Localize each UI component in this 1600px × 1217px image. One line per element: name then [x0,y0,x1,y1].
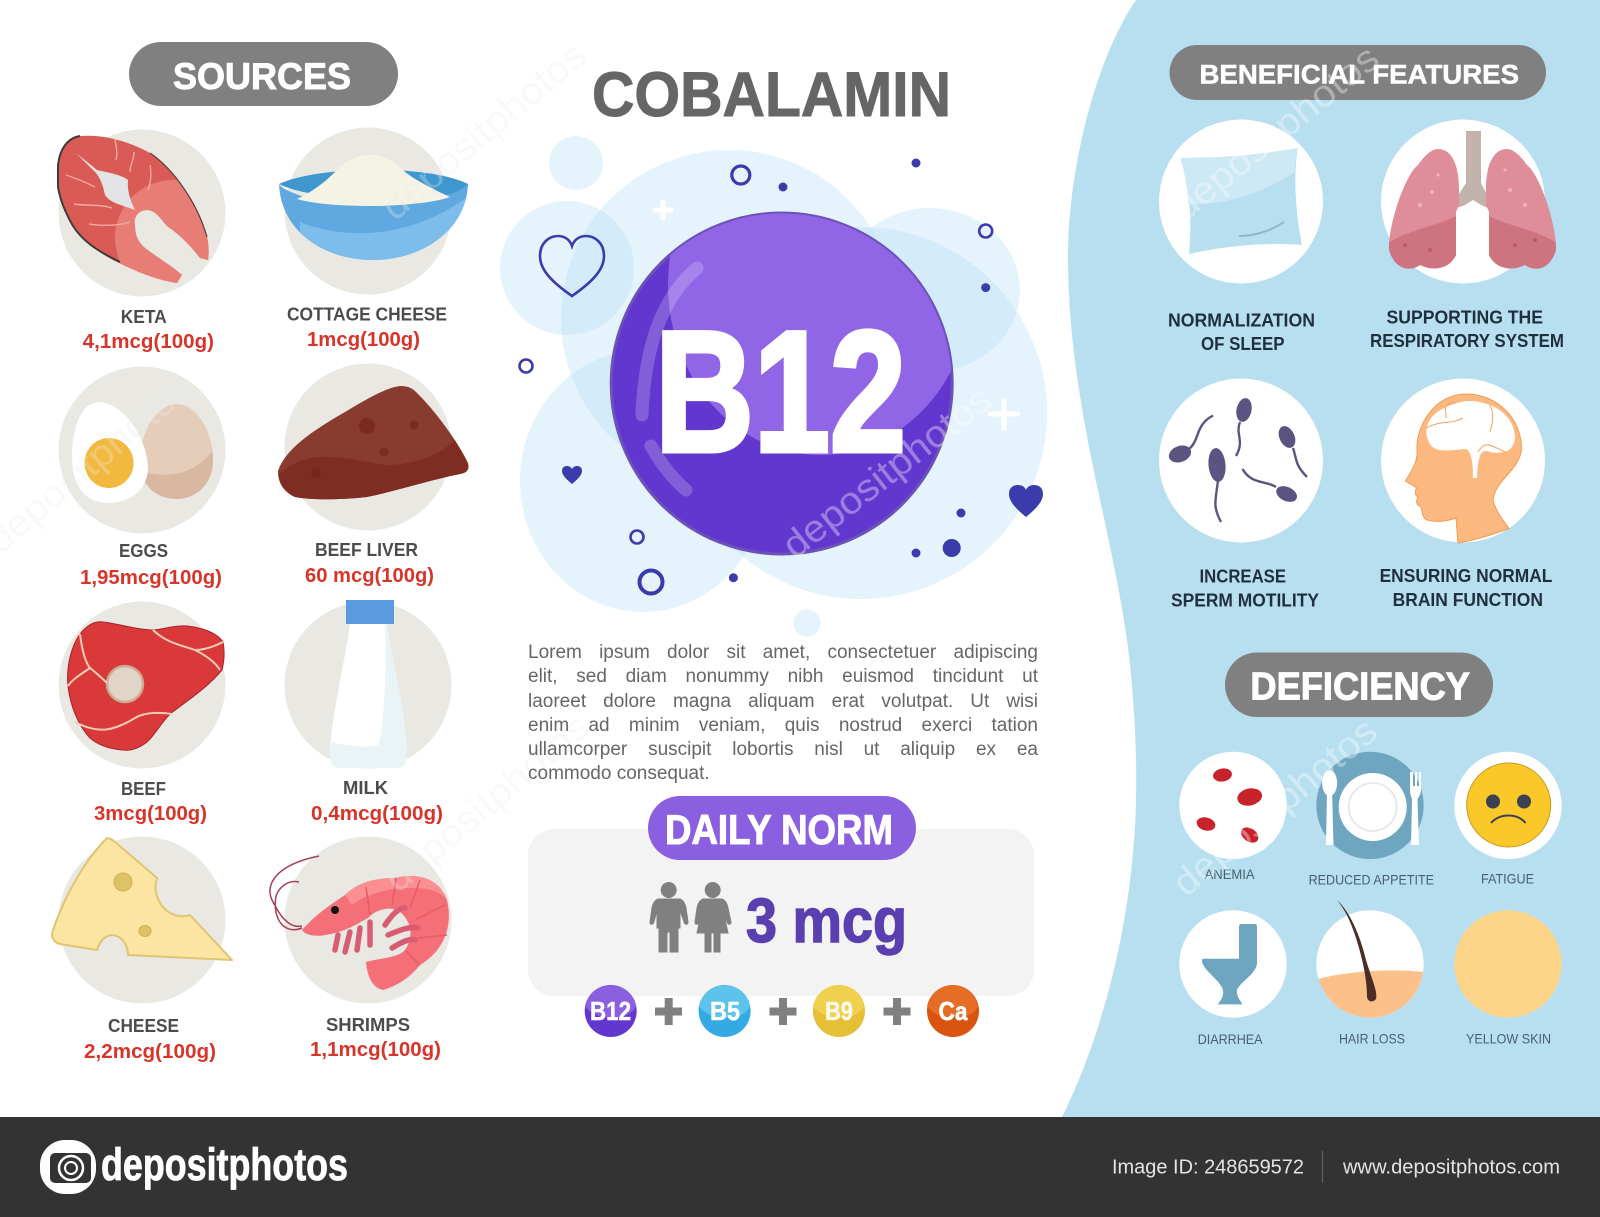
label: beef liver [305,540,434,587]
label: eggs [80,541,222,589]
website: www.depositphotos.com [1342,1156,1560,1179]
icon: anemia [1179,752,1287,859]
label: ensuring normal brain function: ENSURING NORMAL [1380,566,1552,586]
panel: deficiency [1179,652,1562,1047]
icon: shrimp [270,836,452,1004]
text block: lorem ipsum: laoreet dolore magna aliquam erat volutpat. Ut wisi [528,691,1038,712]
image id: Image ID: 248659572 [1112,1156,1304,1179]
label: milk [311,778,443,825]
label: cottage cheese: COTTAGE CHEESE [287,305,447,325]
blue side panel [1062,0,1600,1117]
panel background [528,829,1034,996]
text block: lorem ipsum: commodo consequat. [528,763,710,784]
panel: daily norm [528,796,1034,1037]
label: beef liver: BEEF LIVER [315,540,418,560]
label: normalization of sleep [1168,310,1315,354]
value: 3 mcg: 3 mcg [746,887,907,956]
combination: B12 plus B5 plus B9 plus Ca [585,985,979,1037]
label: shrimps: 1,1mcg(100g) [310,1039,441,1061]
bubble: B9: B9 [825,996,853,1026]
icon: cheese [52,836,232,1004]
icon: diarrhea toilet [1179,910,1287,1018]
text block: lorem ipsum [528,642,1038,784]
vitamin B12 sphere [610,212,954,556]
panel: sources [52,42,475,1063]
label: cheese [84,1016,216,1063]
label: beef [94,779,207,825]
label: increase sperm motility [1171,566,1319,610]
label: keta [83,307,214,353]
label: normalization of sleep: OF SLEEP [1201,334,1284,354]
heading: sources [129,42,398,106]
decorative rings, dots and hearts [520,158,1043,594]
label: yellow skin: YELLOW SKIN [1466,1030,1551,1046]
watermarks: depositphotos [775,378,1000,567]
bubble: B5: B5 [710,996,740,1026]
bubble: B9 [813,985,865,1037]
icon: yellow skin [1454,910,1562,1018]
label: diarrhea: DIARRHEA [1198,1031,1263,1047]
icon: beef steak [58,602,226,768]
logo: camera [40,1140,96,1194]
bubble: B12 [585,985,637,1037]
heading: beneficial features: BENEFICIAL FEATURES [1200,59,1519,89]
heading: daily norm: DAILY NORM [665,806,893,853]
text block: lorem ipsum: enim ad minim veniam, quis nostrud exerci tation [528,715,1038,736]
label: supporting the respiratory system [1370,308,1564,351]
icon: beef liver [278,364,475,530]
icon: sperm cells [1159,378,1323,542]
plus signs [655,998,910,1025]
label: increase sperm motility: INCREASE [1200,566,1286,586]
label: shrimps: SHRIMPS [326,1015,410,1035]
label: shrimps [310,1015,441,1061]
footer bar [0,1117,1600,1217]
icon: cottage cheese bowl [279,128,470,294]
icon: hair loss [1315,900,1425,1020]
watermarks: depositphotos [1164,37,1387,229]
bubble: Ca [927,985,979,1037]
background bubbles [500,136,1047,636]
label: ensuring normal brain function: BRAIN FUNCTION [1393,590,1543,610]
watermarks: depositphotos [1165,710,1386,905]
icon: lungs [1381,120,1560,284]
icon: pillow [1159,120,1323,284]
icon: fatigue face [1454,752,1562,859]
label: cheese: 2,2mcg(100g) [84,1041,216,1063]
text block: lorem ipsum: Lorem ipsum dolor sit amet, consectetuer adipiscing [528,642,1038,663]
logo: wordmark: depositphotos [101,1139,348,1190]
label: fatigue: FATIGUE [1481,870,1534,886]
heading: beneficial features [1170,45,1546,100]
label: reduced appetite: REDUCED APPETITE [1309,872,1434,888]
text block: lorem ipsum: elit, sed diam nonummy nibh euismod tincidunt ut [528,666,1038,687]
heading: deficiency [1225,652,1493,717]
label: ensuring normal brain function [1380,566,1552,610]
panel: beneficial features [1159,45,1564,610]
label: eggs: EGGS [119,541,168,561]
heading: daily norm [648,796,916,860]
label: supporting the respiratory system: SUPPORTING THE [1386,308,1543,328]
heading: sources: SOURCES [173,56,351,97]
vitamin B12 sphere: B12 [655,296,906,488]
label: cottage cheese: 1mcg(100g) [307,329,420,351]
icon: milk bottle [284,600,452,768]
watermarks: depositphotos [377,706,598,901]
bubble: Ca: Ca [938,996,968,1026]
label: milk: MILK [343,778,388,798]
icon: man and woman [650,882,731,952]
label: normalization of sleep: NORMALIZATION [1168,310,1315,330]
icon: reduced appetite plate [1316,752,1424,859]
label: beef: BEEF [121,779,166,799]
label: keta: 4,1mcg(100g) [83,331,214,353]
heading: deficiency: DEFICIENCY [1250,666,1470,708]
icon: head with brain [1381,378,1545,543]
label: eggs: 1,95mcg(100g) [80,567,222,589]
icon: eggs [58,366,226,534]
label: beef liver: 60 mcg(100g) [305,565,434,587]
icon: keta steak [58,130,231,296]
label: supporting the respiratory system: RESPIRATORY SYSTEM [1370,331,1564,351]
bubble: B12: B12 [590,996,631,1026]
text block: lorem ipsum: ullamcorper suscipit lobortis nisl ut aliquip ex ea [528,739,1038,760]
watermarks [0,34,1387,905]
label: milk: 0,4mcg(100g) [311,803,443,825]
title: COBALAMIN [592,60,951,130]
label: keta: KETA [121,307,167,327]
watermarks: depositphotos [374,34,595,229]
bubble: B5 [699,985,751,1037]
label: anemia: ANEMIA [1205,866,1255,882]
label: cheese: CHEESE [108,1016,179,1036]
label: hair loss: HAIR LOSS [1339,1030,1405,1046]
label: beef: 3mcg(100g) [94,803,207,825]
label: increase sperm motility: SPERM MOTILITY [1171,590,1319,610]
label: cottage cheese [287,305,447,351]
